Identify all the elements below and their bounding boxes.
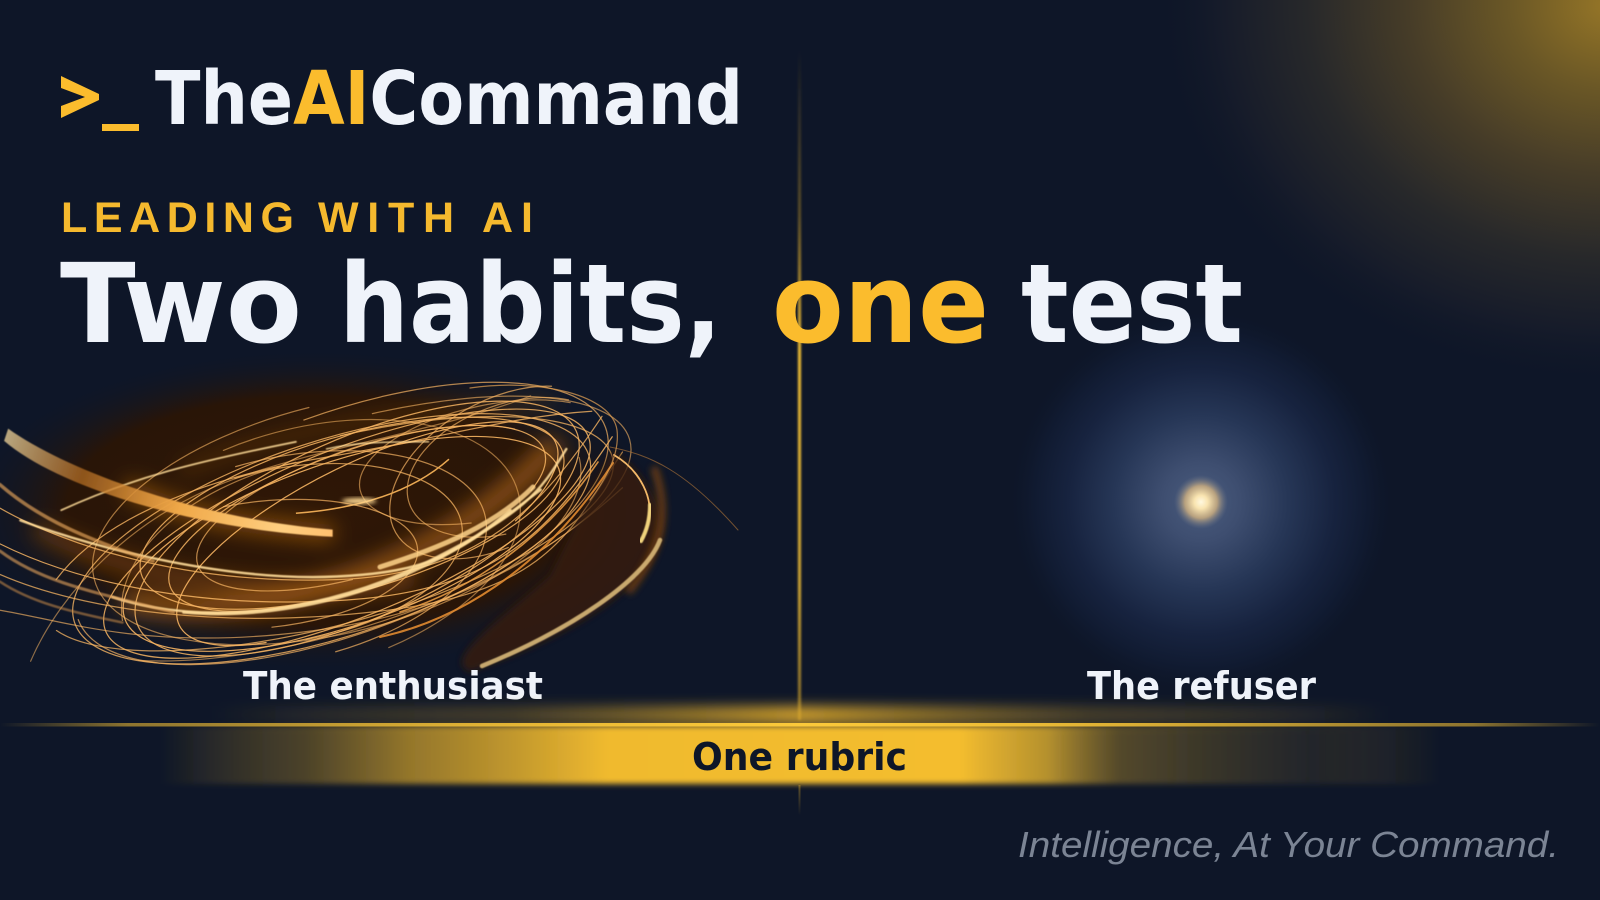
- panel: the enthusiast swirl: [0, 324, 738, 723]
- left ribbons: [0, 485, 173, 622]
- right rim and crescent: [380, 385, 738, 672]
- title: Two: [60, 240, 302, 368]
- corner glow: [1150, 0, 1600, 390]
- tagline: Intelligence, At Your Command.: [1018, 824, 1559, 865]
- logo: [61, 56, 743, 142]
- panel: the refuser orb: [1006, 307, 1396, 697]
- eyebrow heading: WITH: [318, 194, 454, 242]
- inner streak: [296, 459, 449, 513]
- eyebrow heading: LEADING: [61, 194, 294, 242]
- bright arcs: [20, 442, 566, 614]
- left-running strands: [0, 452, 622, 618]
- title: one: [772, 240, 989, 368]
- title: habits,: [339, 240, 722, 368]
- wordmark: TheAICommand: [155, 56, 743, 142]
- eyebrow heading: AI: [482, 194, 533, 242]
- divider: vertical gold line: [798, 50, 801, 815]
- rubric label: One rubric: [692, 735, 907, 779]
- label: the enthusiast: The enthusiast: [243, 664, 543, 708]
- title: test: [1021, 240, 1243, 368]
- title: [60, 240, 1243, 368]
- icon: terminal prompt: [61, 76, 139, 131]
- eyebrow heading: [61, 194, 533, 242]
- bright streak: [4, 429, 333, 537]
- label: the refuser: The refuser: [1087, 664, 1316, 708]
- broad glow along main rings: [41, 403, 551, 606]
- rubric band: [0, 706, 1600, 784]
